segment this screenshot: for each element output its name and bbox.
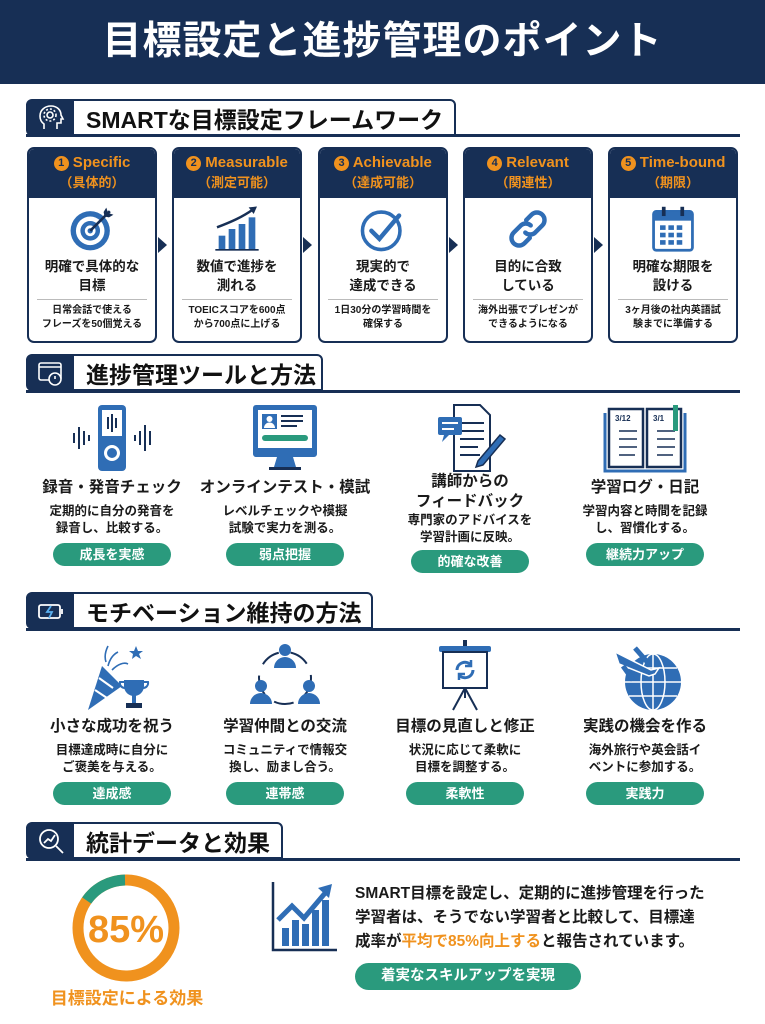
motivation: review: 状況に応じて柔軟に bbox=[409, 743, 521, 757]
motivation: practice: 海外旅行や英会話イ bbox=[589, 743, 701, 757]
card 1 Specific: 日常会話で使える bbox=[52, 305, 132, 316]
motivation: peers: 学習仲間との交流 bbox=[223, 718, 347, 735]
section heading: SMART: SMARTな目標設定フレームワーク bbox=[86, 106, 443, 132]
card 5 Time-bound: 3ヶ月後の社内英語試 bbox=[625, 305, 721, 316]
card 4 Relevant: Relevant bbox=[506, 154, 569, 171]
icon: target bbox=[70, 208, 114, 250]
icon: easel refresh bbox=[439, 640, 491, 710]
motivation: review: 目標を調整する。 bbox=[415, 760, 515, 774]
section heading: stats bbox=[26, 822, 283, 859]
tool: online test: 弱点把握 bbox=[259, 547, 311, 562]
card 3 Achievable: 達成できる bbox=[349, 278, 417, 293]
card 2 Measurable: 2 bbox=[191, 157, 197, 169]
tool: recording bbox=[42, 405, 182, 566]
card 2 Measurable: 数値で進捗を bbox=[196, 259, 278, 274]
card 2 Measurable: 測れる bbox=[217, 278, 257, 293]
arrow bbox=[594, 237, 603, 253]
motivation: practice: ベントに参加する。 bbox=[589, 760, 701, 774]
card 1 Specific: （具体的） bbox=[59, 175, 124, 190]
icon: document pen speech bbox=[438, 404, 506, 472]
icon: monitor bbox=[253, 405, 317, 470]
tool: feedback: 専門家のアドバイスを bbox=[408, 513, 532, 527]
tool: feedback: 学習計画に反映。 bbox=[420, 530, 520, 544]
card 1 Specific: 明確で具体的な bbox=[45, 259, 139, 274]
tool: log diary: 学習内容と時間を記録 bbox=[582, 504, 708, 518]
card 5 Time-bound: 5 bbox=[625, 157, 631, 169]
donut chart 85% bbox=[51, 874, 203, 1008]
stats text: 成率が平均で85%向上すると報告されています。 bbox=[355, 933, 694, 950]
card 1 Specific: 1 bbox=[58, 157, 64, 169]
icon: open book: 3/1 bbox=[653, 414, 665, 423]
motivation: peers bbox=[223, 644, 347, 805]
card 4 Relevant: 目的に合致 bbox=[494, 259, 562, 274]
motivation: peers: 連帯感 bbox=[265, 786, 304, 801]
stats text: SMART目標を設定し、定期的に進捗管理を行った bbox=[355, 885, 705, 902]
card 4 Relevant: 海外出張でプレゼンが bbox=[478, 305, 578, 316]
icon: calendar bbox=[652, 206, 694, 252]
tool: log diary: し、習慣化する。 bbox=[595, 521, 695, 535]
card 1 Specific bbox=[27, 147, 157, 343]
stats text bbox=[355, 884, 705, 950]
motivation: practice: 実践力 bbox=[625, 786, 664, 801]
icon: plane globe bbox=[616, 646, 681, 710]
section heading: motivation bbox=[26, 592, 373, 629]
icon: magnifier chart bbox=[28, 824, 74, 857]
card 2 Measurable: （測定可能） bbox=[198, 175, 276, 190]
tool: recording: 定期的に自分の発音を bbox=[49, 504, 174, 518]
motivation: celebrate: ご褒美を与える。 bbox=[62, 760, 162, 774]
icon: open book: 3/12 bbox=[615, 414, 631, 423]
tool: feedback: 講師からの bbox=[431, 473, 509, 490]
icon: audio player bbox=[73, 405, 151, 471]
card 3 Achievable: 1日30分の学習時間を bbox=[335, 305, 431, 316]
card 3 Achievable: 確保する bbox=[363, 319, 403, 330]
tool: recording: 録音し、比較する。 bbox=[56, 521, 168, 535]
card 2 Measurable: Measurable bbox=[205, 154, 288, 171]
donut chart 85%: 85% bbox=[88, 909, 164, 951]
card 4 Relevant: 4 bbox=[492, 157, 498, 169]
section heading: SMART bbox=[26, 99, 456, 136]
stats text: 学習者は、そうでない学習者と比較して、目標達 bbox=[355, 909, 695, 926]
motivation: review bbox=[395, 640, 535, 805]
title header bbox=[0, 0, 765, 84]
arrow bbox=[449, 237, 458, 253]
icon: screen stopwatch bbox=[28, 356, 74, 389]
icon: people circle bbox=[250, 644, 320, 705]
motivation: practice: 実践の機会を作る bbox=[583, 718, 707, 735]
card 5 Time-bound: 設ける bbox=[653, 278, 693, 293]
motivation: review: 目標の見直しと修正 bbox=[395, 718, 535, 735]
icon: growth chart bbox=[272, 882, 337, 952]
card 2 Measurable: TOEICスコアを600点 bbox=[188, 305, 286, 316]
tool: log diary: 継続力アップ bbox=[606, 547, 684, 562]
icon: party popper trophy bbox=[88, 646, 150, 710]
motivation: celebrate: 達成感 bbox=[92, 786, 132, 801]
card 5 Time-bound: 明確な期限を bbox=[632, 259, 714, 274]
icon: battery bolt bbox=[28, 594, 74, 627]
motivation: practice bbox=[583, 646, 707, 805]
card 4 Relevant bbox=[463, 147, 593, 343]
card 1 Specific: Specific bbox=[73, 154, 130, 171]
section heading: tools bbox=[26, 354, 323, 391]
tool: recording: 成長を実感 bbox=[79, 547, 144, 562]
title header: 目標設定と進捗管理のポイント bbox=[102, 20, 662, 63]
icon: check circle bbox=[360, 210, 402, 252]
motivation: peers: 換し、励まし合う。 bbox=[229, 760, 341, 774]
card 2 Measurable: から700点に上げる bbox=[194, 319, 280, 330]
card 3 Achievable bbox=[318, 147, 448, 343]
card 4 Relevant: （関連性） bbox=[495, 175, 560, 190]
motivation: celebrate: 小さな成功を祝う bbox=[50, 718, 174, 735]
tool: online test: レベルチェックや模擬 bbox=[222, 504, 348, 518]
callout pill bbox=[355, 963, 581, 990]
card 2 Measurable bbox=[172, 147, 302, 343]
card 3 Achievable: 現実的で bbox=[356, 259, 410, 274]
card 3 Achievable: （達成可能） bbox=[344, 175, 422, 190]
tool: online test: オンラインテスト・模試 bbox=[200, 479, 370, 496]
motivation: review: 柔軟性 bbox=[445, 786, 484, 801]
motivation: celebrate: 目標達成時に自分に bbox=[56, 743, 168, 757]
icon: chain link bbox=[509, 210, 547, 248]
card 1 Specific: フレーズを50個覚える bbox=[42, 319, 142, 330]
icon: head gear bbox=[28, 101, 74, 134]
card 1 Specific: 目標 bbox=[78, 278, 106, 293]
tool: recording: 録音・発音チェック bbox=[42, 479, 182, 496]
card 5 Time-bound: 験までに準備する bbox=[633, 319, 713, 330]
card 3 Achievable: Achievable bbox=[353, 154, 432, 171]
card 4 Relevant: している bbox=[501, 278, 555, 293]
section heading: stats: 統計データと効果 bbox=[86, 830, 270, 856]
card 4 Relevant: できるようになる bbox=[488, 319, 568, 330]
tool: log diary bbox=[582, 405, 708, 566]
arrow bbox=[303, 237, 312, 253]
section heading: tools: 進捗管理ツールと方法 bbox=[86, 362, 316, 388]
motivation: celebrate bbox=[50, 646, 174, 805]
icon: open book bbox=[604, 405, 686, 472]
callout pill: 着実なスキルアップを実現 bbox=[381, 968, 555, 984]
card 5 Time-bound bbox=[608, 147, 738, 343]
card 5 Time-bound: Time-bound bbox=[640, 154, 725, 171]
icon: bar chart bbox=[215, 206, 259, 251]
motivation: peers: コミュニティで情報交 bbox=[223, 743, 347, 757]
section heading: motivation: モチベーション維持の方法 bbox=[86, 600, 362, 626]
tool: feedback: 的確な改善 bbox=[437, 554, 502, 569]
card 3 Achievable: 3 bbox=[339, 157, 345, 169]
donut label: 目標設定による効果 bbox=[51, 989, 203, 1008]
tool: feedback bbox=[408, 404, 532, 573]
arrow bbox=[158, 237, 167, 253]
tool: online test: 試験で実力を測る。 bbox=[229, 521, 341, 535]
tool: online test bbox=[200, 405, 370, 566]
tool: feedback: フィードバック bbox=[416, 493, 524, 510]
tool: log diary: 学習ログ・日記 bbox=[591, 479, 699, 496]
card 5 Time-bound: （期限） bbox=[647, 175, 699, 190]
